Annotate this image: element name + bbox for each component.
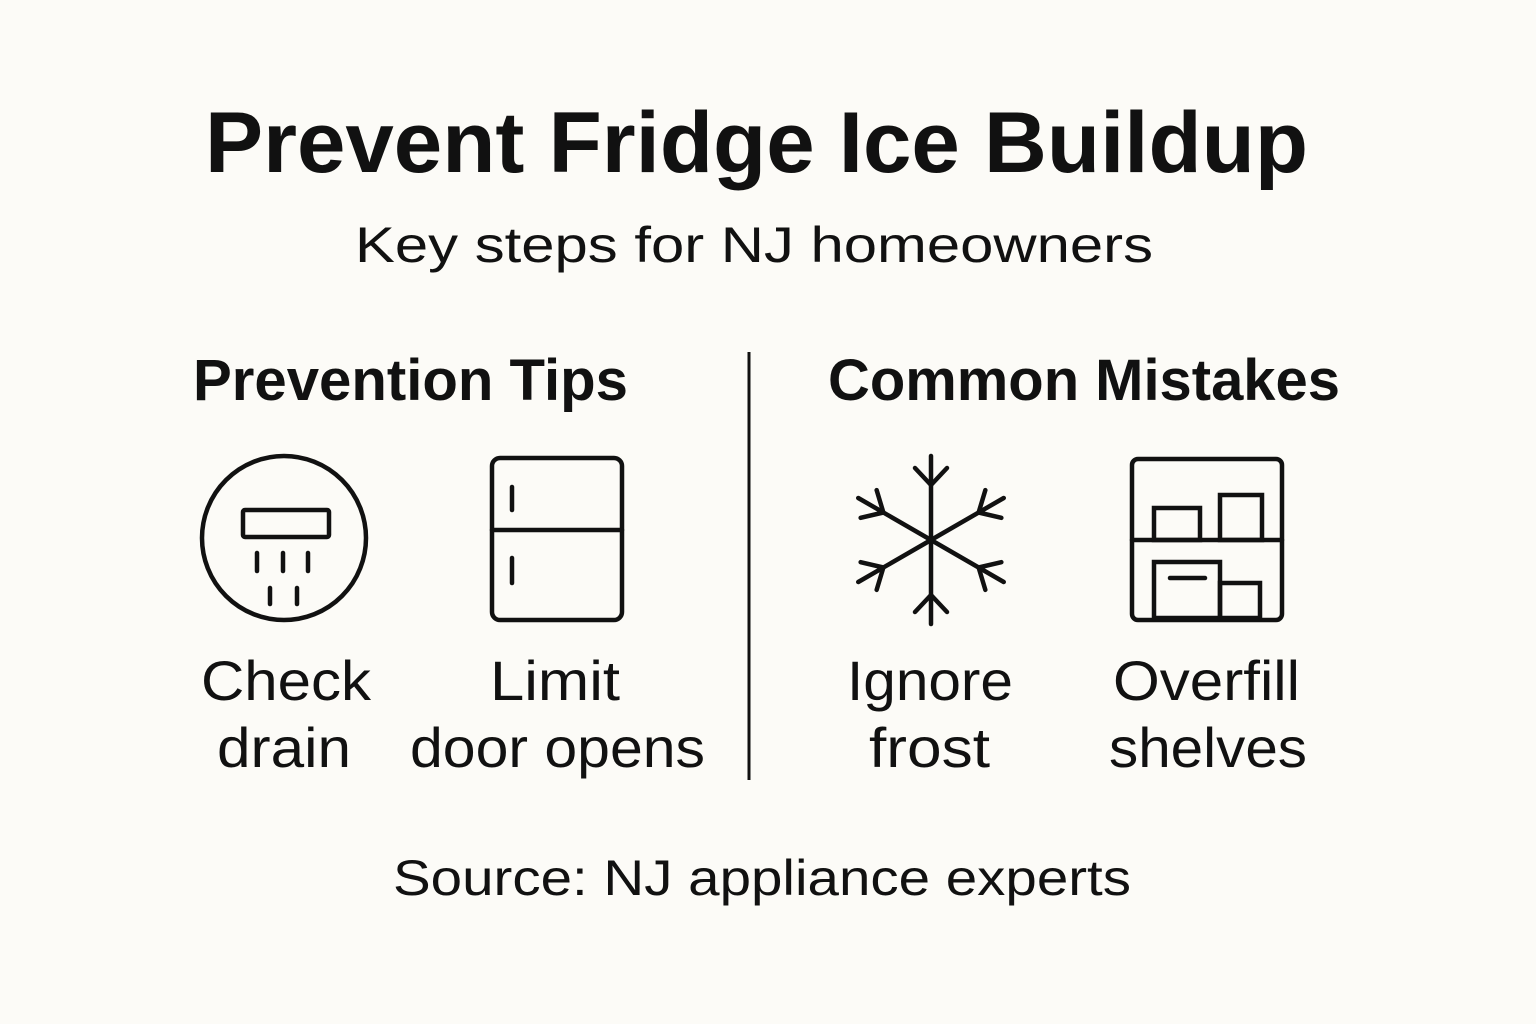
icon: snowflake — [850, 456, 1012, 624]
heading: prevention tips: Prevention Tips — [193, 348, 628, 413]
label: ignore frost: Ignore — [847, 649, 1013, 712]
title: Prevent Fridge Ice Buildup — [205, 95, 1308, 191]
label: ignore frost: frost — [869, 716, 990, 779]
icon: drain — [202, 456, 366, 620]
subtitle: Key steps for NJ homeowners — [355, 217, 1153, 273]
label: check drain: drain — [217, 716, 351, 779]
heading: common mistakes: Common Mistakes — [828, 348, 1340, 413]
label: check drain — [201, 649, 372, 779]
label: ignore frost — [847, 649, 1013, 779]
icon: shelves — [1132, 459, 1282, 620]
icon: fridge — [492, 458, 622, 620]
label: limit door opens — [410, 649, 705, 779]
source: Source: NJ appliance experts — [393, 850, 1131, 906]
label: limit door opens: Limit — [490, 649, 620, 712]
label: overfill shelves — [1109, 649, 1307, 779]
label: limit door opens: door opens — [410, 716, 705, 779]
label: overfill shelves: Overfill — [1113, 649, 1300, 712]
label: check drain: Check — [201, 649, 372, 712]
divider — [748, 352, 750, 780]
label: overfill shelves: shelves — [1109, 716, 1307, 779]
